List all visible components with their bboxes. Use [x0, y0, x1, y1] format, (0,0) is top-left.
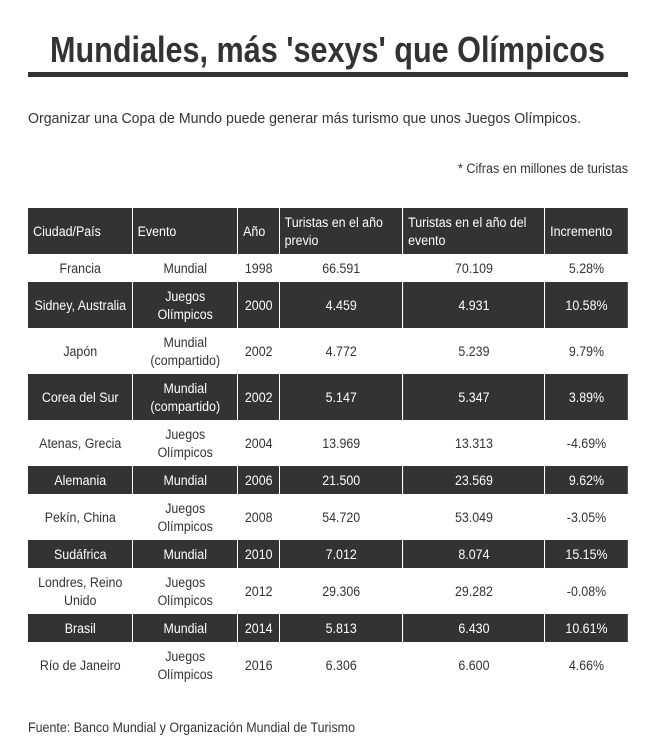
- data table: 2008: [245, 510, 273, 525]
- data table: Mundial: [163, 547, 207, 562]
- data table: 29.282: [455, 584, 493, 599]
- data table: 6.600: [458, 658, 490, 673]
- data table: 10.61%: [565, 621, 608, 636]
- data table: Olímpicos: [158, 307, 213, 322]
- data table: 13.969: [322, 436, 360, 451]
- data table: Francia: [60, 261, 101, 276]
- data table: Olímpicos: [158, 445, 213, 460]
- data table: 6.430: [458, 621, 490, 636]
- units note: * Cifras en millones de turistas: [458, 161, 628, 176]
- data table: previo: [285, 233, 318, 248]
- data table: 2014: [245, 621, 273, 636]
- data table: 9.79%: [569, 344, 604, 359]
- data table: Londres, Reino: [38, 575, 122, 590]
- data table: 4.459: [326, 298, 357, 313]
- data table: 2000: [245, 298, 273, 313]
- data table: 2004: [245, 436, 273, 451]
- data table: 15.15%: [565, 547, 608, 562]
- data table: 21.500: [322, 473, 360, 488]
- data table: Incremento: [550, 224, 612, 239]
- data table: Japón: [63, 344, 97, 359]
- data table: 2012: [245, 584, 273, 599]
- data table: 54.720: [322, 510, 360, 525]
- data table: (compartido): [150, 353, 220, 368]
- data table: 2002: [245, 390, 273, 405]
- data table: 6.306: [326, 658, 357, 673]
- data table: -4.69%: [567, 436, 606, 451]
- data table: 3.89%: [569, 390, 604, 405]
- data table: 7.012: [326, 547, 357, 562]
- data table: 1998: [245, 261, 273, 276]
- data table: Mundial: [163, 261, 207, 276]
- data table: 8.074: [458, 547, 490, 562]
- data table: 9.62%: [569, 473, 604, 488]
- data table: 10.58%: [565, 298, 608, 313]
- data table: Juegos: [165, 427, 205, 442]
- data table: 2016: [245, 658, 273, 673]
- data table: Ciudad/País: [33, 224, 101, 239]
- data table: Olímpicos: [158, 519, 213, 534]
- data table: Corea del Sur: [42, 390, 119, 405]
- data table: Turistas en el año del: [408, 215, 526, 230]
- data table: 4.66%: [569, 658, 604, 673]
- data table: 5.28%: [569, 261, 604, 276]
- data table: Atenas, Grecia: [39, 436, 121, 451]
- title rule: [28, 72, 628, 77]
- data table: Sidney, Australia: [34, 298, 126, 313]
- data table: 5.147: [326, 390, 357, 405]
- data table: Mundial: [163, 335, 207, 350]
- data table: -0.08%: [567, 584, 606, 599]
- intro text: Organizar una Copa de Mundo puede generar más turismo que unos Juegos Olímpicos.: [28, 110, 581, 127]
- data table: 4.931: [458, 298, 490, 313]
- data table: 2002: [245, 344, 273, 359]
- data table: Juegos: [165, 501, 205, 516]
- data table: Mundial: [163, 621, 207, 636]
- data table: 23.569: [455, 473, 493, 488]
- data table: Evento: [138, 224, 176, 239]
- data table: 5.813: [326, 621, 357, 636]
- data table: Olímpicos: [158, 667, 213, 682]
- data table: Juegos: [165, 289, 205, 304]
- data table: Juegos: [165, 575, 205, 590]
- data table: Olímpicos: [158, 593, 213, 608]
- data table: 5.347: [458, 390, 490, 405]
- data table: Alemania: [54, 473, 106, 488]
- data table: 13.313: [455, 436, 493, 451]
- data table: Brasil: [65, 621, 96, 636]
- data table: Año: [243, 224, 265, 239]
- data table: Mundial: [163, 381, 207, 396]
- data table: Juegos: [165, 649, 205, 664]
- data table: [28, 208, 628, 682]
- data table: 66.591: [322, 261, 360, 276]
- data table: Sudáfrica: [54, 547, 106, 562]
- data table: Turistas en el año: [285, 215, 383, 230]
- data table: 2006: [245, 473, 273, 488]
- data table: -3.05%: [567, 510, 606, 525]
- data table: 5.239: [458, 344, 490, 359]
- data table: Mundial: [163, 473, 207, 488]
- data table: 4.772: [326, 344, 357, 359]
- data table: Unido: [64, 593, 96, 608]
- data table: (compartido): [150, 399, 220, 414]
- data table: 29.306: [322, 584, 360, 599]
- data table: Río de Janeiro: [40, 658, 121, 673]
- data table: 70.109: [455, 261, 493, 276]
- data table: evento: [408, 233, 445, 248]
- data table: 2010: [245, 547, 273, 562]
- data table: Pekín, China: [45, 510, 116, 525]
- source: Fuente: Banco Mundial y Organización Mundial de Turismo: [28, 720, 355, 735]
- data table: 53.049: [455, 510, 493, 525]
